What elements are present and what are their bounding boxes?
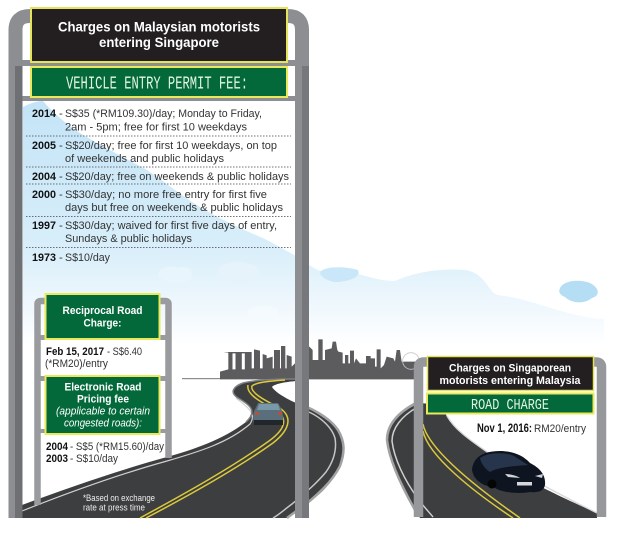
entry 1973: - [59,252,63,264]
crossbar [22,60,296,66]
road charge banner: ROAD CHARGE [471,397,549,414]
road charge banner [427,394,594,414]
road charge rate: Nov 1, 2016: [477,423,532,435]
entry 2004: S$20/day; free on weekends & public holidays [65,171,289,183]
reciprocal road charge text: Feb 15, 2017 [46,346,104,358]
entry 2014: 2am - 5pm; free for first 10 weekdays [65,122,247,134]
entry 1997: - [59,220,63,232]
entry 1973: 1973 [32,252,56,264]
horizon line [182,378,222,379]
exchange rate footnote [83,493,155,512]
outer road verge [387,403,416,510]
crossbar [22,96,296,101]
left road shoulder [233,379,295,422]
main heading panel: Charges on Malaysian motorists [58,18,260,34]
road surface [22,379,343,518]
electronic road pricing sign: congested roads): [64,418,142,430]
reciprocal road charge text: - S$6.40 [107,346,142,358]
right road [387,403,597,518]
entry 2000: days but free on weekends & public holidays [65,202,283,214]
road charge rate: RM20/entry [534,423,586,435]
small car on left road [253,403,283,425]
sky and clouds background [23,101,604,345]
road edge line [447,416,597,513]
electronic road pricing rates: - S$5 (*RM15.60)/day [70,441,164,453]
inner gantry frame [38,301,168,505]
crossbar [40,429,166,433]
large black car on right road [472,451,545,493]
entry 2005: - [59,140,63,152]
reciprocal road charge sign [46,294,160,339]
road edge line left [22,398,252,511]
entry 2005: of weekends and public holidays [65,153,224,165]
vehicle entry permit fee banner: VEHICLE ENTRY PERMIT FEE: [66,74,248,94]
reciprocal road charge sign: Charge: [84,318,122,330]
road charge rate [477,423,586,435]
exchange rate footnote: *Based on exchange [83,493,155,503]
reciprocal road charge text [45,346,142,370]
fee history list [26,108,291,264]
exchange rate footnote: rate at press time [83,502,145,512]
road edge line [273,412,336,518]
road edge line [392,408,433,517]
cloud [247,306,279,320]
electronic road pricing sign: Electronic Road [64,382,142,394]
skyline [220,339,419,379]
cloud [217,262,261,284]
right gantry frame [418,362,602,517]
entry 2014: - [59,108,63,120]
entry 2004: 2004 [32,171,57,183]
outer road verge [287,404,344,518]
entry 2000 [32,189,283,214]
electronic road pricing rates: - S$10/day [70,453,118,465]
entry 2005 [32,140,277,165]
cloud [559,281,598,302]
electronic road pricing sign: (applicable to certain [56,406,150,418]
entry 1973: S$10/day [65,252,110,264]
crossbar [40,335,166,340]
entry 1997 [32,220,277,245]
right heading panel: motorists entering Malaysia [440,375,581,387]
electronic road pricing rates: 2003 [46,453,68,465]
cloud [158,266,192,283]
cloud [320,267,359,282]
entry 2000: S$30/day; no more free entry for first five [65,189,267,201]
vehicle entry permit fee banner [31,67,287,97]
crossbar [40,376,166,381]
entry 2014 [32,108,262,134]
left gantry frame [15,16,309,518]
centre double yellow line [423,424,520,518]
reciprocal road charge sign: Reciprocal Road [62,305,143,317]
centre double yellow line [146,380,288,518]
left post shade [15,66,22,518]
entry 2014: S$35 (*RM109.30)/day; Monday to Friday, [65,108,262,120]
entry 2000: - [59,189,63,201]
electronic road pricing sign: Pricing fee [77,394,129,406]
electronic road pricing rates [46,441,164,465]
entry 2000: 2000 [32,189,56,201]
reciprocal road charge text: (*RM20)/entry [45,358,108,370]
entry 2014: 2014 [32,108,57,120]
entry 1997: 1997 [32,220,56,232]
entry 1997: Sundays & public holidays [65,233,192,245]
left road [22,379,344,518]
main heading panel [31,8,287,62]
main heading panel: entering Singapore [99,34,219,50]
entry 2005: 2005 [32,140,56,152]
entry 2005: S$20/day; free for first 10 weekdays, on top [65,140,277,152]
road surface [387,403,597,518]
right heading panel [428,356,594,390]
entry 1973 [32,252,110,264]
entry 1997: S$30/day; waived for first five days of entry, [65,220,277,232]
electronic road pricing rates: 2004 [46,441,69,453]
right heading panel: Charges on Singaporean [449,362,571,374]
right post shade [302,66,309,518]
entry 2004: - [59,171,63,183]
electronic road pricing sign [46,376,160,434]
